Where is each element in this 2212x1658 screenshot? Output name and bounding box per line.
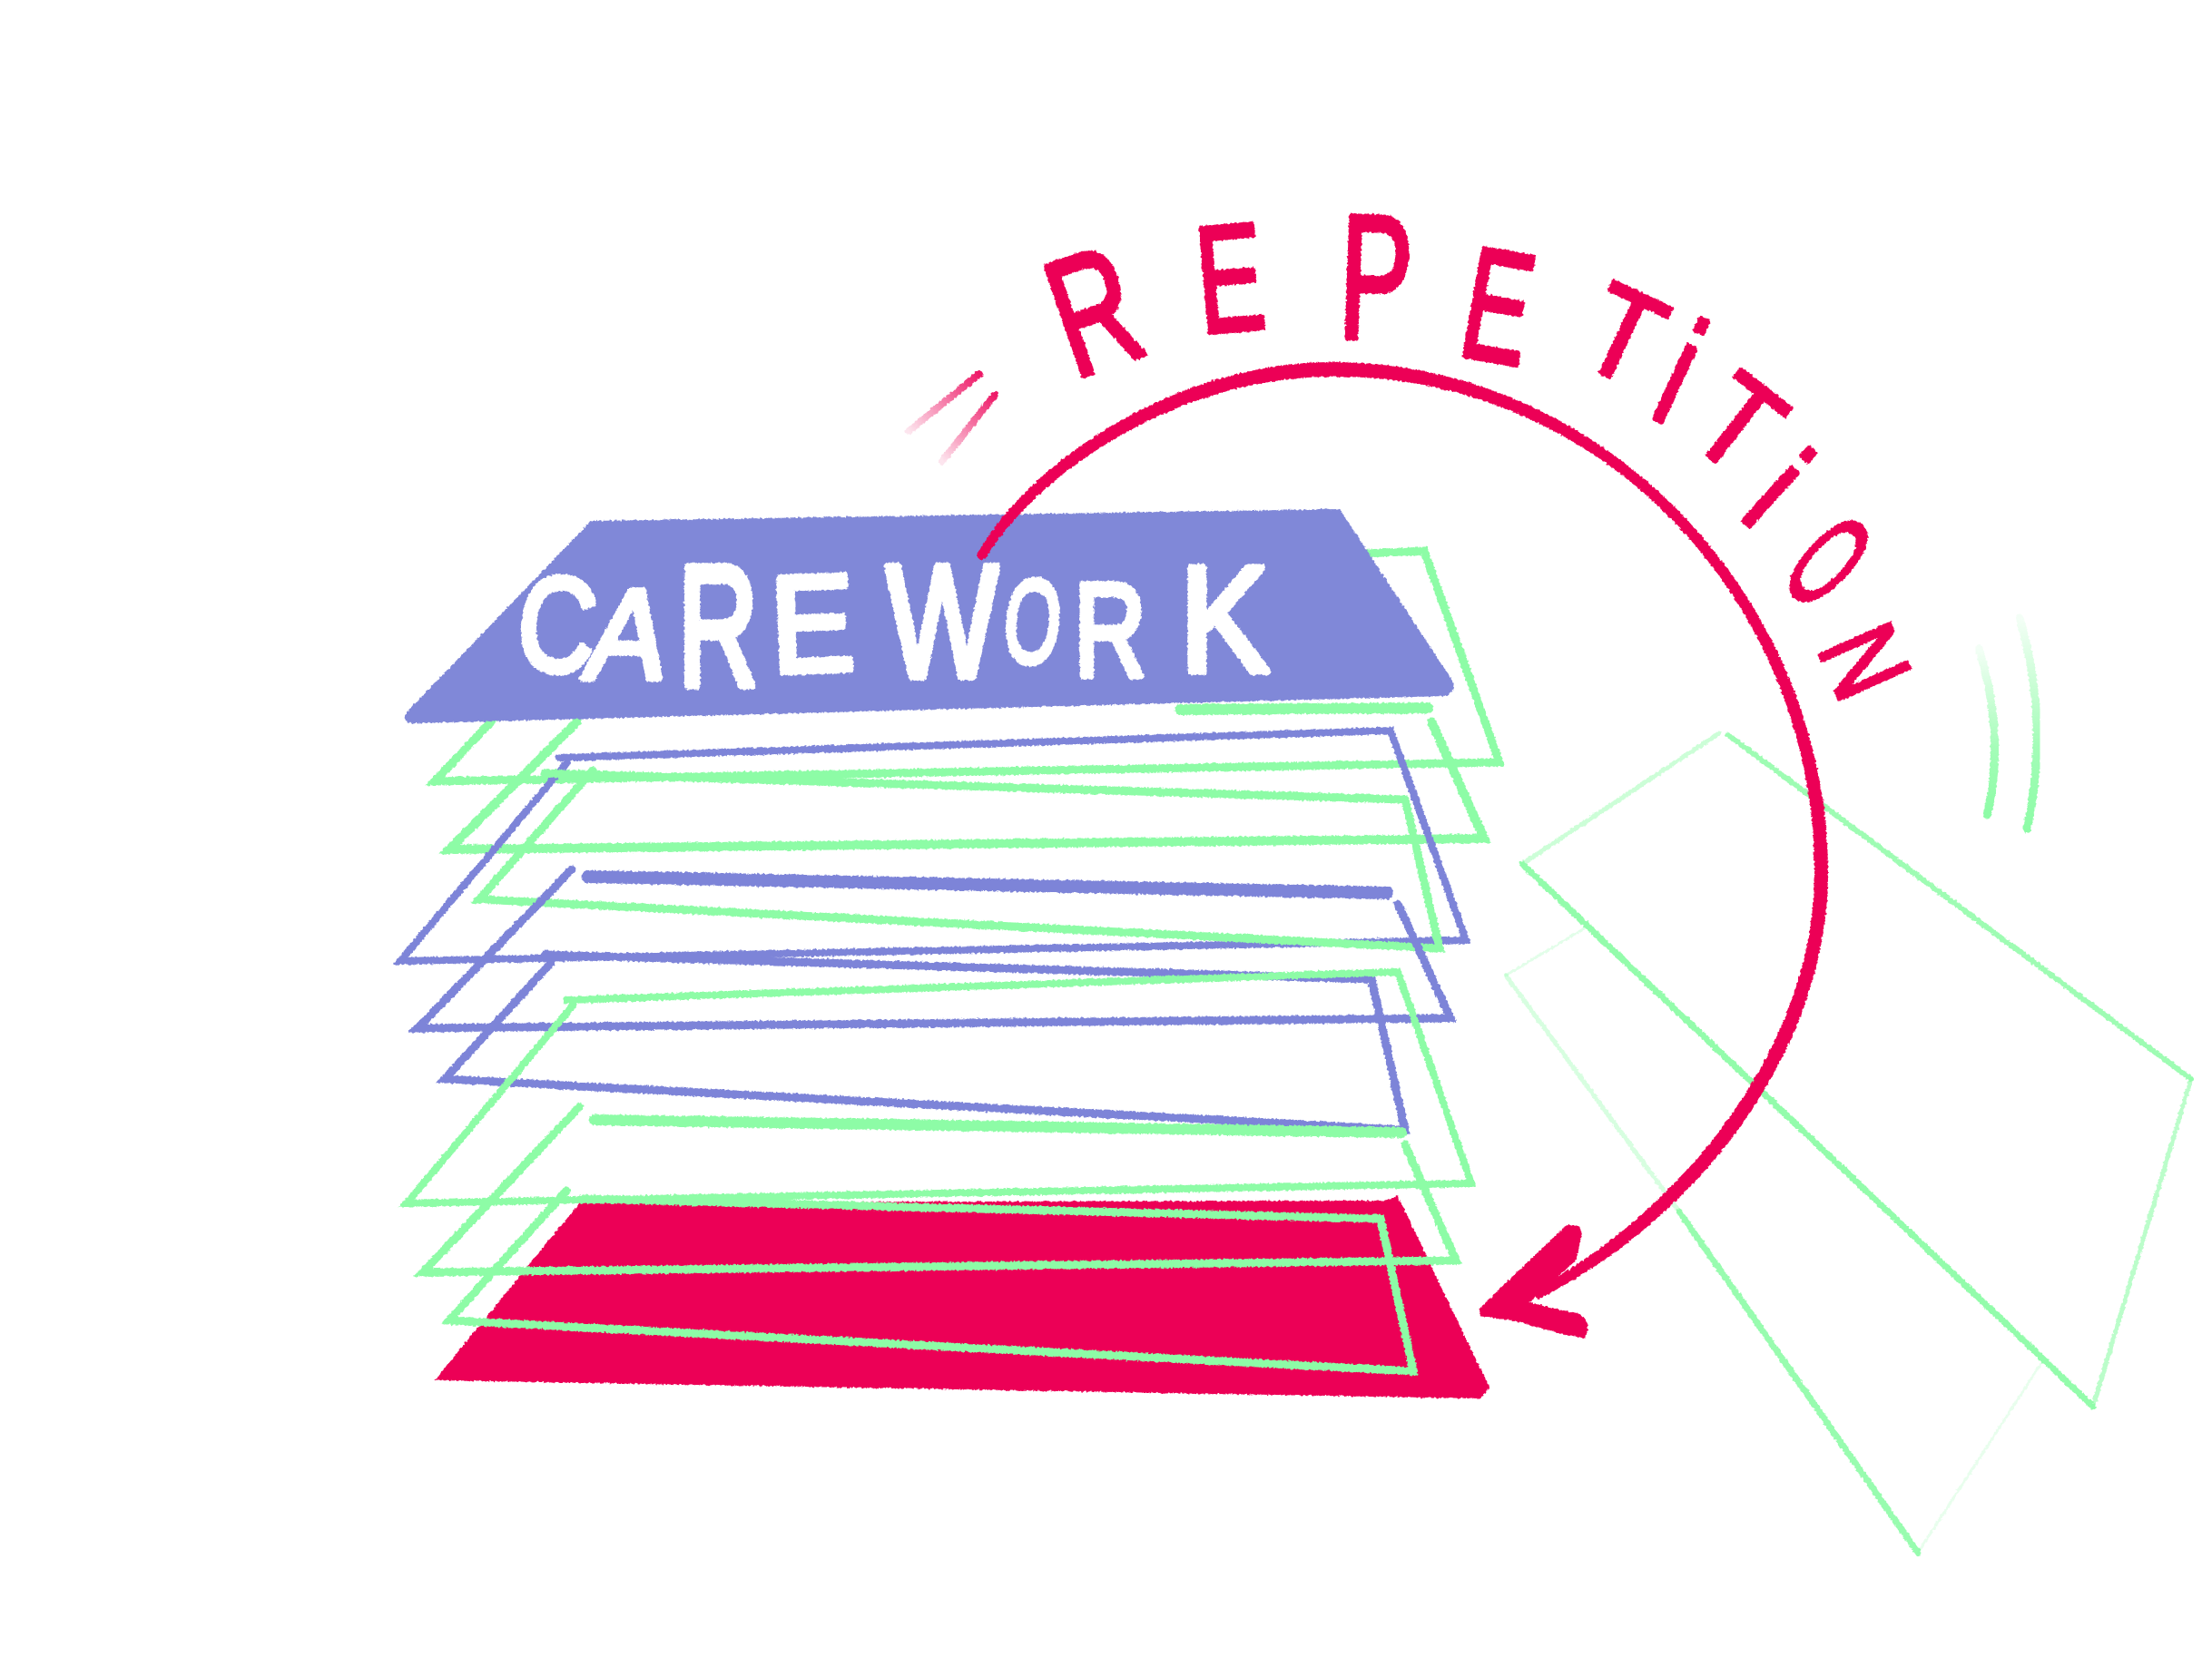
label: CAREWORK: O [998,553,1067,691]
sheet: green outline D [479,770,1440,948]
sheet: green outline J [449,1191,1413,1371]
sheet: green outline A behind top slab [435,551,1499,781]
sheet: green outline B lower part [449,721,1484,849]
label: CAREWORK: W [887,532,998,711]
label: REPETITION: E [1189,191,1271,367]
label: REPETITION: T [1666,346,1810,502]
arrow head [1481,1226,1587,1337]
label: REPETITION: E [1450,213,1547,399]
label: CAREWORK: R [1074,554,1146,705]
label: CAREWORK: K [1180,535,1269,704]
motion lines: green arcs [1979,618,2037,829]
label: REPETITION: O [1758,488,1900,634]
label: REPETITION: N [1794,606,1935,716]
label: CAREWORK: C [511,547,604,703]
label: REPETITION: T [1562,256,1686,415]
label: REPETITION: i [1633,290,1727,455]
sheet: blue outline C [400,731,1466,961]
motion lines: red hatches [909,374,995,461]
sheet: blue outline G [445,955,1405,1130]
sheet: lower pale outline [1506,927,2041,1553]
label: REPETITION: R [1025,210,1163,413]
label: CAREWORK: E [768,545,857,701]
sheet: green outline H [407,972,1471,1203]
label: REPETITION: i [1718,424,1838,554]
sheet: thick blue stroke E [588,877,1387,893]
label: REPETITION [1025,178,1935,716]
sheet: upper pale outline [1522,733,2191,1407]
pale tumbling sheets on the right [1506,733,2191,1553]
sheet: bottom solid red [435,1196,1489,1398]
sheet: green outline I top [595,1120,1401,1133]
label: CAREWORK: A [576,563,681,706]
sheet: green outline I lower part [423,1107,1456,1272]
stack of sheets [400,509,1499,1398]
top slab: blue sheet [405,509,1454,723]
sheet: green outline B behind top slab [1180,708,1428,710]
arrow shaft [977,362,1828,1300]
label: CAREWORK [511,530,1269,721]
sheet: blue outline F [418,869,1450,1028]
label: REPETITION: P [1336,178,1416,378]
arrow: repetition loop from top sheet to bottom sheet [977,362,1828,1337]
label: CAREWORK: R [678,530,758,721]
